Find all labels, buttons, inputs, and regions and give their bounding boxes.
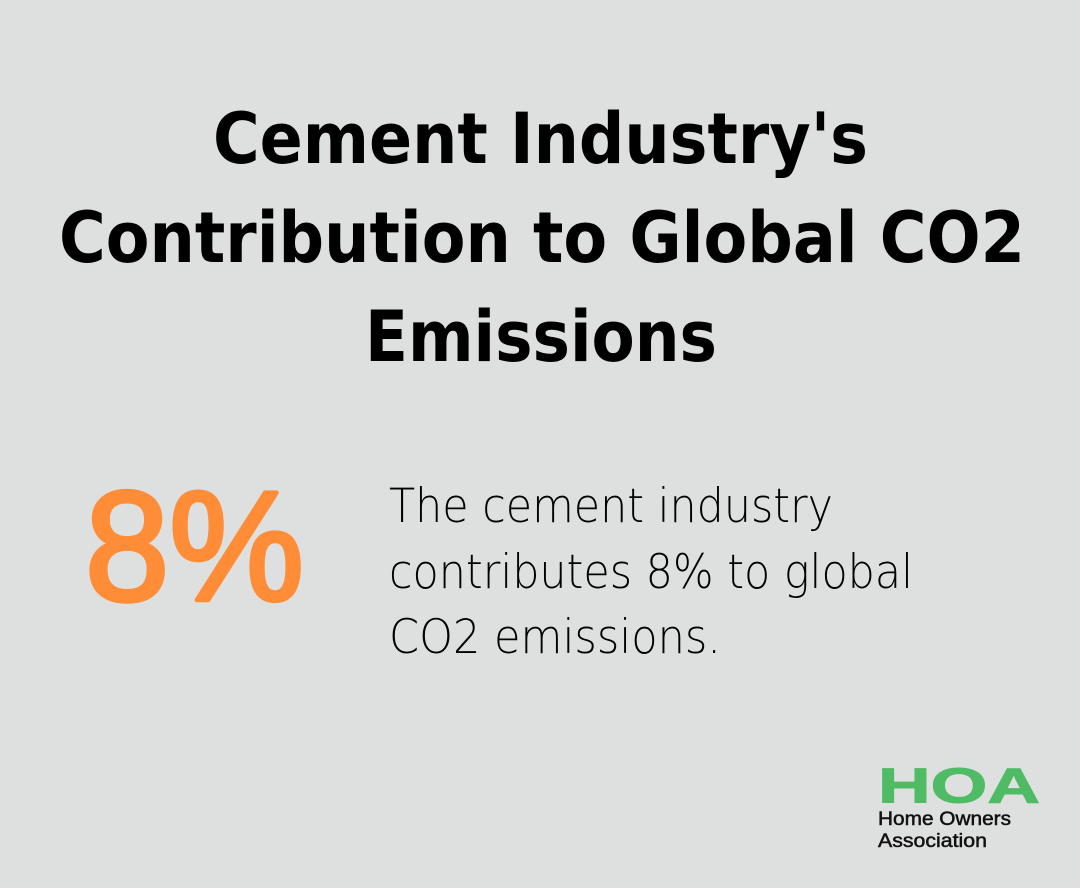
title: Cement Industry's bbox=[213, 98, 868, 180]
description text: contributes 8% to global bbox=[389, 545, 913, 600]
logo: HOA Home Owners Association bbox=[878, 760, 1040, 852]
description text: The cement industry bbox=[389, 479, 833, 534]
logo: HOA Home Owners Association: Home Owners bbox=[878, 809, 1011, 830]
title bbox=[59, 98, 1025, 378]
description text: CO2 emissions. bbox=[389, 610, 721, 665]
big statistic: 8%: 8% bbox=[85, 460, 304, 634]
description text bbox=[389, 479, 913, 665]
logo: HOA Home Owners Association: Association bbox=[878, 831, 987, 852]
logo: HOA Home Owners Association: HOA bbox=[878, 760, 1040, 814]
title: Emissions bbox=[365, 296, 717, 378]
